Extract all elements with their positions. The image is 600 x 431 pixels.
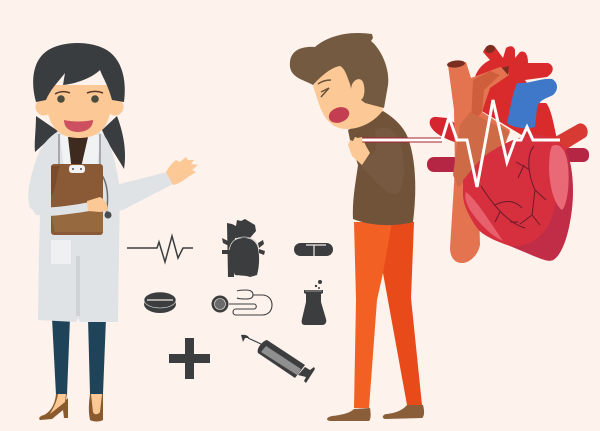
- doctor holding hand: [87, 197, 108, 212]
- icon: capsule: [294, 243, 333, 256]
- rear vessel right: [560, 148, 589, 162]
- man face: [313, 62, 383, 129]
- man sweater sleeve: [360, 128, 404, 194]
- man mouth: [327, 104, 351, 126]
- doctor shirt: [60, 135, 100, 170]
- vena cava: [448, 62, 510, 263]
- clipboard: [51, 164, 103, 235]
- coronary vessels: [481, 146, 546, 228]
- man ear: [351, 79, 364, 100]
- right upper vessel: [555, 123, 588, 150]
- man sweater: [348, 111, 415, 225]
- coat pocket: [51, 240, 71, 264]
- left atrial lobe: [430, 117, 462, 144]
- blue vein: [507, 79, 557, 128]
- human heart: [362, 44, 589, 263]
- doctor eyebrows: [55, 92, 103, 94]
- man with chest pain: [290, 33, 424, 421]
- doctor back hair: [35, 116, 125, 169]
- man hair: [290, 33, 388, 108]
- man eyebrow and closed eye: [318, 80, 331, 97]
- doctor face: [46, 85, 112, 138]
- icon: flask: [302, 280, 326, 325]
- doctor figure: [28, 43, 198, 422]
- ECG pulse line: [362, 100, 560, 187]
- heart ventricles: [463, 135, 573, 261]
- man hand on chest: [348, 137, 370, 165]
- medical icons: [127, 219, 333, 383]
- doctor arm across clipboard: [30, 202, 90, 216]
- doctor ears: [36, 98, 52, 116]
- man shoes: [327, 405, 424, 421]
- coat centre opening: [76, 256, 80, 316]
- doctor front hair: [33, 43, 125, 102]
- man trousers: [354, 222, 422, 408]
- icon: tablet: [144, 292, 176, 313]
- doctor trousers: [52, 318, 106, 395]
- doctor shoes: [39, 394, 103, 422]
- pulmonary artery: [475, 45, 557, 140]
- ventricle shading: [510, 150, 573, 261]
- doctor eyes: [57, 95, 65, 103]
- icon: plus sign: [169, 338, 210, 379]
- doctor open hand: [166, 157, 198, 185]
- stethoscope cords: [59, 134, 100, 166]
- icon: ECG line: [127, 236, 193, 262]
- icon: stethoscope: [212, 290, 272, 315]
- heart highlight left: [465, 192, 503, 241]
- doctor lab coat: [28, 132, 120, 322]
- heart highlight right: [549, 145, 569, 210]
- icon: syringe: [241, 335, 315, 383]
- icon: heart silhouette: [222, 219, 265, 277]
- vessel shadow: [471, 71, 500, 125]
- doctor pointing arm: [108, 172, 173, 210]
- doctor mouth: [64, 120, 93, 132]
- stethoscope chest piece: [104, 212, 112, 218]
- rear vessel left: [427, 157, 467, 172]
